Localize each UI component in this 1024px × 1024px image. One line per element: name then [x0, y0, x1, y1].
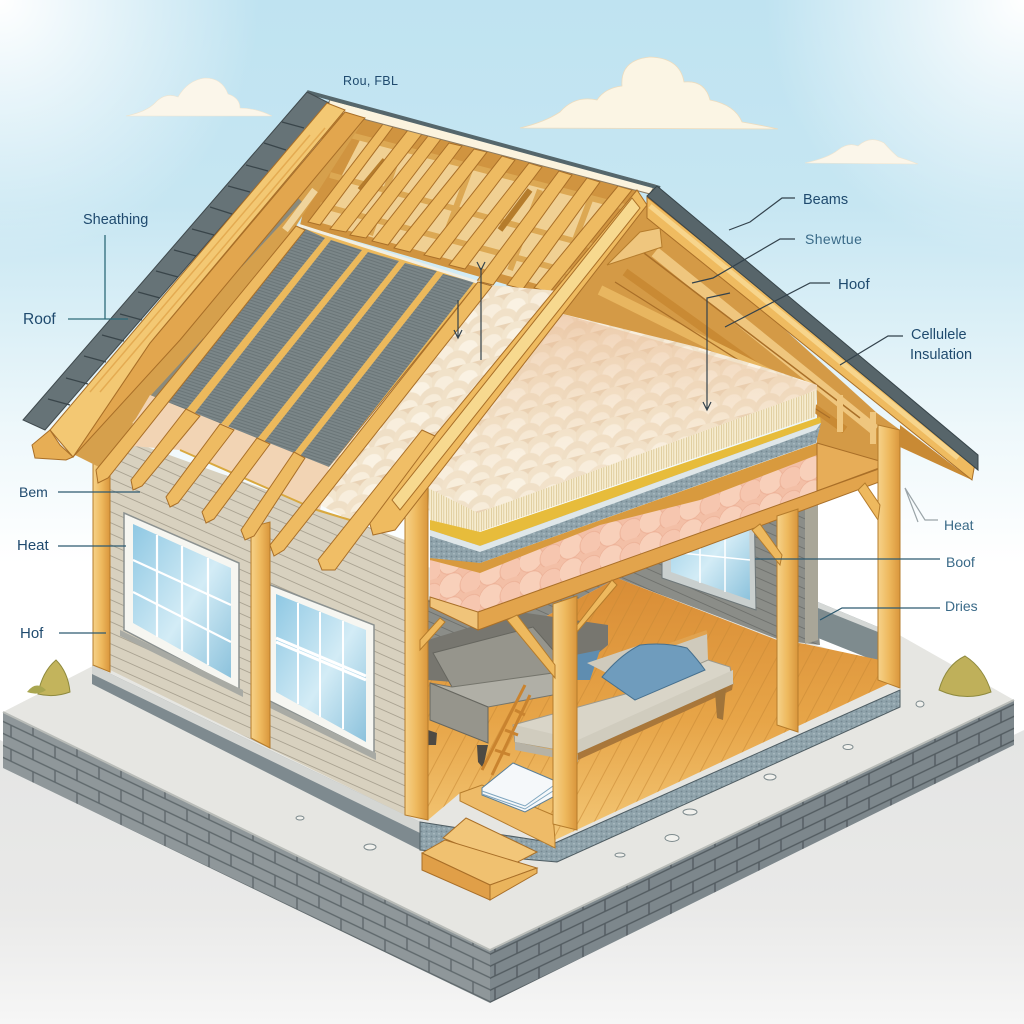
label: cellulose insulation: Cellulele	[911, 327, 967, 343]
label: hof	[20, 625, 106, 642]
label: top: Rou, FBL	[343, 74, 398, 88]
shingle panel	[158, 225, 480, 467]
yellow vapour line	[430, 417, 821, 546]
wood floor	[428, 578, 890, 840]
roof	[23, 92, 978, 570]
small ladder	[482, 685, 530, 775]
label: heat right: Heat	[944, 517, 974, 533]
left insulation wedge	[320, 284, 570, 520]
back window	[662, 495, 756, 610]
shrub left	[27, 660, 70, 696]
main left rafter	[32, 103, 365, 460]
label: bem: Bem	[19, 484, 48, 500]
panel strip 4	[264, 263, 437, 453]
labels	[17, 74, 978, 642]
main gable beam	[318, 190, 647, 570]
label: dries: Dries	[945, 598, 978, 614]
grey membrane	[430, 423, 821, 563]
label: sheathing: Sheathing	[83, 212, 148, 228]
label: cellulose insulation: Insulation	[910, 347, 972, 363]
rafter tails	[96, 226, 492, 556]
grey sofa	[428, 612, 608, 768]
panel strip 2	[194, 240, 362, 425]
cellulose insulation top	[428, 312, 817, 532]
cloud left	[126, 78, 272, 116]
arrow: vertical leaders	[454, 262, 730, 410]
label: boof: Boof	[946, 554, 975, 570]
label: roof	[23, 311, 128, 328]
back wall grey	[428, 490, 820, 680]
left wall siding	[100, 430, 405, 815]
floor platform beam	[430, 443, 890, 630]
panel strip 1	[160, 228, 325, 410]
label: hoof right: Hoof	[838, 276, 871, 293]
window 1	[120, 513, 243, 697]
ridge board	[325, 100, 655, 194]
towel stack	[482, 763, 553, 812]
panel strip 5	[300, 274, 474, 467]
bed	[513, 632, 733, 762]
posts and braces	[405, 425, 900, 830]
label: roof: Roof	[23, 311, 56, 328]
label: shewtue	[692, 231, 862, 283]
label: hof: Hof	[20, 625, 44, 642]
foundation	[3, 560, 1014, 1003]
plinth	[92, 665, 420, 850]
upper rafters	[308, 124, 632, 292]
step platform	[460, 785, 555, 848]
back sky opening	[800, 465, 880, 665]
label: bem	[19, 484, 140, 500]
panel strip 3	[227, 252, 399, 439]
blanket	[602, 644, 705, 700]
label: shewtue: Shewtue	[805, 231, 862, 247]
cloud centre	[520, 57, 778, 129]
upper framing background	[300, 105, 640, 300]
wood backing	[430, 443, 817, 613]
insulation fibre edge	[428, 390, 817, 532]
label: sheathing	[83, 212, 148, 319]
label: heat right	[905, 488, 974, 533]
house body	[92, 205, 900, 900]
shrub right	[939, 656, 991, 697]
window 2	[266, 584, 376, 760]
slab top	[3, 560, 1014, 950]
label: hoof right	[725, 276, 871, 327]
insulation band between tails	[120, 395, 329, 510]
yellow sill line	[180, 450, 350, 520]
label: heat left	[17, 537, 126, 554]
left eave shingles	[23, 92, 329, 430]
brick wall left	[3, 712, 490, 1003]
pink insulation	[430, 455, 817, 612]
right roof edge	[647, 186, 978, 470]
front steps	[422, 818, 537, 900]
label: heat left: Heat	[17, 537, 50, 554]
room interior	[428, 465, 890, 848]
cloud right	[805, 140, 918, 164]
label: cellulose insulation	[840, 327, 972, 365]
pebbles	[125, 694, 924, 857]
ground	[0, 730, 1024, 1024]
label: beams	[729, 192, 848, 230]
label: dries	[820, 598, 978, 620]
brick wall right	[490, 700, 1014, 1003]
wall posts	[93, 437, 270, 748]
label: beams: Beams	[803, 192, 848, 208]
right gable interior	[555, 205, 900, 468]
right roof rafter	[647, 197, 975, 480]
open framing left	[75, 118, 365, 470]
